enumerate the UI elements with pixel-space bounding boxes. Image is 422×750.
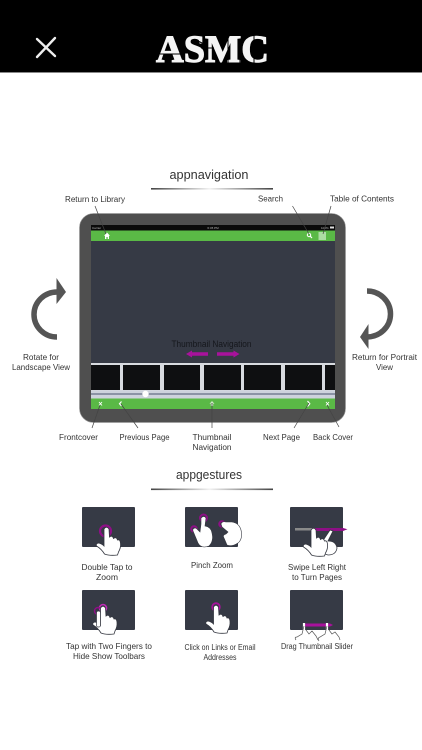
icon: next page bbox=[308, 401, 310, 406]
status bar: Carrier bbox=[92, 226, 101, 230]
status bar: 6:45 PM bbox=[207, 226, 219, 230]
top toolbar bbox=[91, 230, 335, 241]
label: rotate for landscape view bbox=[12, 352, 71, 372]
status bar bbox=[91, 225, 335, 230]
callout: previous page: Previous Page bbox=[120, 432, 170, 442]
gesture: swipe left right: Swipe Left Right bbox=[288, 562, 347, 572]
icon: close bbox=[37, 38, 55, 57]
callout: thumbnail navigation bbox=[192, 403, 232, 452]
heading: appnavigation: appnavigation bbox=[170, 167, 248, 182]
icon: back cover bbox=[326, 402, 329, 406]
heading: appgestures bbox=[151, 467, 273, 490]
gesture: drag thumbnail slider: Drag Thumbnail Slider bbox=[281, 641, 353, 651]
icon: contents bbox=[318, 233, 326, 239]
gesture: click on links bbox=[184, 590, 256, 662]
gesture: swipe left right: to Turn Pages bbox=[292, 572, 342, 582]
gesture: click on links: Addresses bbox=[204, 652, 236, 662]
heading: appgestures: appgestures bbox=[176, 467, 242, 482]
callout: back cover bbox=[313, 405, 353, 442]
callout: search bbox=[258, 194, 309, 234]
gesture: double tap to zoom: Zoom bbox=[96, 572, 118, 582]
callout: table of contents bbox=[323, 194, 394, 234]
callout: back cover: Back Cover bbox=[313, 432, 353, 442]
gesture: tap with two fingers: Tap with Two Fingers to bbox=[66, 641, 152, 651]
icon: home bbox=[104, 232, 110, 239]
arrow: thumbnails left bbox=[186, 350, 208, 358]
thumbnail strip bbox=[91, 363, 335, 391]
gesture: double tap to zoom bbox=[82, 507, 135, 582]
gesture: pinch zoom: Pinch Zoom bbox=[191, 560, 233, 570]
gesture: tap with two fingers bbox=[66, 590, 152, 661]
logo: ASMC: ASMC bbox=[156, 28, 269, 71]
status bar: 100% bbox=[321, 226, 329, 230]
callout: thumbnail navigation: Navigation bbox=[192, 442, 232, 452]
icon: thumbnails bbox=[210, 401, 214, 406]
arrow: thumbnails right bbox=[217, 350, 240, 358]
gesture: pinch zoom bbox=[185, 507, 242, 570]
header bar bbox=[0, 0, 422, 73]
gesture: click on links: Click on Links or Email bbox=[184, 642, 256, 652]
callout: front cover bbox=[59, 405, 100, 442]
callout: table of contents: Table of Contents bbox=[330, 194, 394, 204]
icon: front cover bbox=[99, 402, 102, 406]
gesture: drag thumbnail slider bbox=[281, 590, 353, 651]
arrow: return to portrait bbox=[360, 291, 390, 349]
slider bbox=[91, 390, 335, 398]
callout: return to library bbox=[65, 194, 126, 234]
label: rotate for landscape view: Rotate for bbox=[23, 352, 59, 362]
gesture: tap with two fingers: Hide Show Toolbars bbox=[73, 651, 145, 661]
callout: thumbnail navigation: Thumbnail bbox=[192, 432, 232, 442]
gesture: double tap to zoom: Double Tap to bbox=[82, 562, 133, 572]
callout: front cover: Frontcover bbox=[59, 432, 98, 442]
tablet diagram bbox=[80, 214, 346, 422]
callout: next page: Next Page bbox=[263, 432, 300, 442]
callout: previous page bbox=[120, 404, 170, 442]
label: rotate for landscape view: Landscape View bbox=[12, 362, 71, 372]
label: return for portrait view: View bbox=[376, 362, 394, 372]
tablet body bbox=[80, 214, 346, 422]
icon: search bbox=[307, 233, 312, 238]
bottom toolbar bbox=[91, 398, 335, 409]
icon: previous page bbox=[120, 402, 122, 406]
gesture: swipe left right bbox=[288, 507, 348, 582]
thumbnail navigation label: Thumbnail Navigation bbox=[172, 339, 252, 349]
arrow: rotate to landscape bbox=[34, 278, 66, 337]
callout: search: Search bbox=[258, 194, 283, 204]
callout: next page bbox=[263, 403, 309, 442]
callout: return to library: Return to Library bbox=[65, 194, 126, 204]
heading: appnavigation bbox=[151, 167, 273, 190]
screen bbox=[91, 241, 335, 363]
label: return for portrait view: Return for Portrait bbox=[352, 352, 418, 362]
label: return for portrait view bbox=[352, 352, 418, 372]
